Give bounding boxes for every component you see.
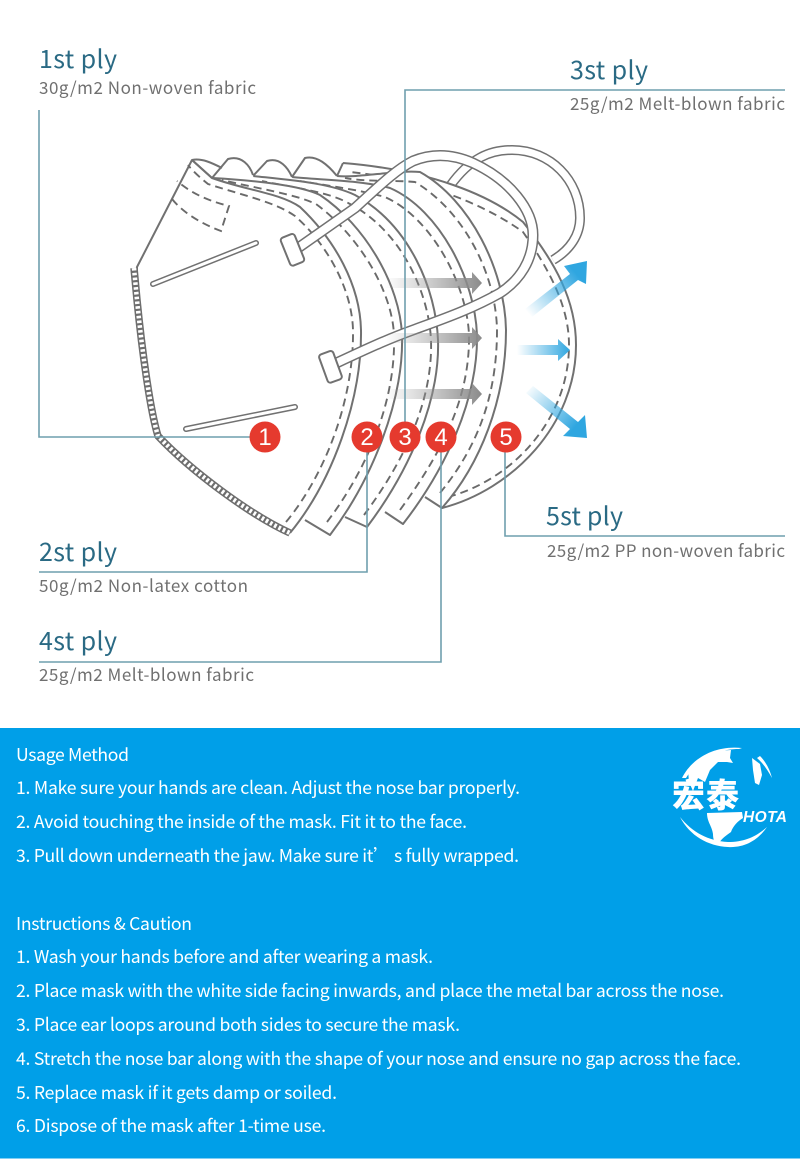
label: 2st ply: 2st ply bbox=[39, 533, 117, 569]
label: 3st ply bbox=[570, 51, 785, 115]
number badges: 5 bbox=[499, 424, 513, 451]
ply 1 front layer bbox=[134, 160, 361, 533]
ear loop tab lower bbox=[318, 350, 343, 383]
number badges: 3 bbox=[398, 424, 412, 451]
ply 2 layer bbox=[212, 158, 402, 535]
number badges: 4 bbox=[434, 424, 448, 451]
front ear loop bbox=[298, 155, 533, 366]
seam bbox=[134, 268, 290, 533]
label: 3st ply: 25g/m2 Melt-blown fabric bbox=[570, 90, 785, 115]
label: 4st ply: 4st ply bbox=[39, 622, 117, 658]
usage method text: 1. Make sure your hands are clean. Adjust the nose bar properly. bbox=[16, 775, 520, 800]
instructions and caution text: 1. Wash your hands before and after wearing a mask. bbox=[16, 944, 433, 969]
usage method text: 2. Avoid touching the inside of the mask. Fit it to the face. bbox=[16, 809, 467, 834]
logo: HOTA globe bbox=[672, 748, 787, 847]
strap slot upper bbox=[153, 243, 256, 284]
instructions and caution text: 6. Dispose of the mask after 1-time use. bbox=[16, 1113, 326, 1138]
usage method text bbox=[16, 742, 520, 868]
label: 1st ply: 1st ply bbox=[39, 40, 117, 76]
label: 5st ply: 25g/m2 PP non-woven fabric bbox=[547, 537, 785, 562]
airflow arrows blue bbox=[517, 261, 587, 438]
blue instructions panel bbox=[0, 728, 800, 1158]
instructions and caution text: 2. Place mask with the white side facing inwards, and place the metal bar across the nose. bbox=[16, 978, 724, 1003]
label: 4st ply: 25g/m2 Melt-blown fabric bbox=[39, 661, 254, 686]
instructions and caution text bbox=[16, 911, 741, 1138]
number badges: 1 bbox=[258, 424, 272, 451]
ply 3 layer bbox=[253, 160, 438, 527]
label: 5st ply bbox=[546, 497, 785, 562]
instructions and caution text: 4. Stretch the nose bar along with the shape of your nose and ensure no gap across the face. bbox=[16, 1046, 741, 1071]
logo: HOTA globe: 宏泰 bbox=[672, 769, 739, 817]
instructions and caution text: 5. Replace mask if it gets damp or soiled. bbox=[16, 1080, 337, 1105]
ply 5 layer bbox=[337, 163, 506, 508]
outer layer bbox=[343, 163, 576, 508]
label: 3st ply: 3st ply bbox=[570, 51, 648, 87]
strap slot lower bbox=[186, 407, 295, 429]
leader lines bbox=[39, 90, 785, 662]
number badges: 2 bbox=[360, 424, 374, 451]
label: 1st ply: 30g/m2 Non-woven fabric bbox=[39, 74, 256, 99]
logo: HOTA globe: HOTA bbox=[743, 809, 787, 826]
ear loop tab upper bbox=[280, 233, 305, 267]
back ear loop bbox=[450, 150, 580, 260]
instructions and caution text: Instructions & Caution bbox=[16, 911, 192, 936]
label: 1st ply bbox=[39, 40, 256, 99]
label: 2st ply: 50g/m2 Non-latex cotton bbox=[39, 572, 248, 597]
label: 5st ply: 5st ply bbox=[546, 497, 623, 533]
nose panel dashes bbox=[172, 181, 229, 231]
instructions and caution text: 3. Place ear loops around both sides to secure the mask. bbox=[16, 1012, 460, 1037]
ply 4 layer bbox=[292, 157, 477, 524]
number badges bbox=[250, 422, 522, 452]
usage method text: 3. Pull down underneath the jaw. Make sure it’ s fully wrapped. bbox=[16, 843, 519, 868]
usage method text: Usage Method bbox=[16, 742, 129, 767]
label: 4st ply bbox=[39, 622, 254, 686]
airflow arrows grey bbox=[385, 272, 482, 405]
mask illustration bbox=[134, 150, 580, 535]
label: 2st ply bbox=[39, 533, 248, 597]
